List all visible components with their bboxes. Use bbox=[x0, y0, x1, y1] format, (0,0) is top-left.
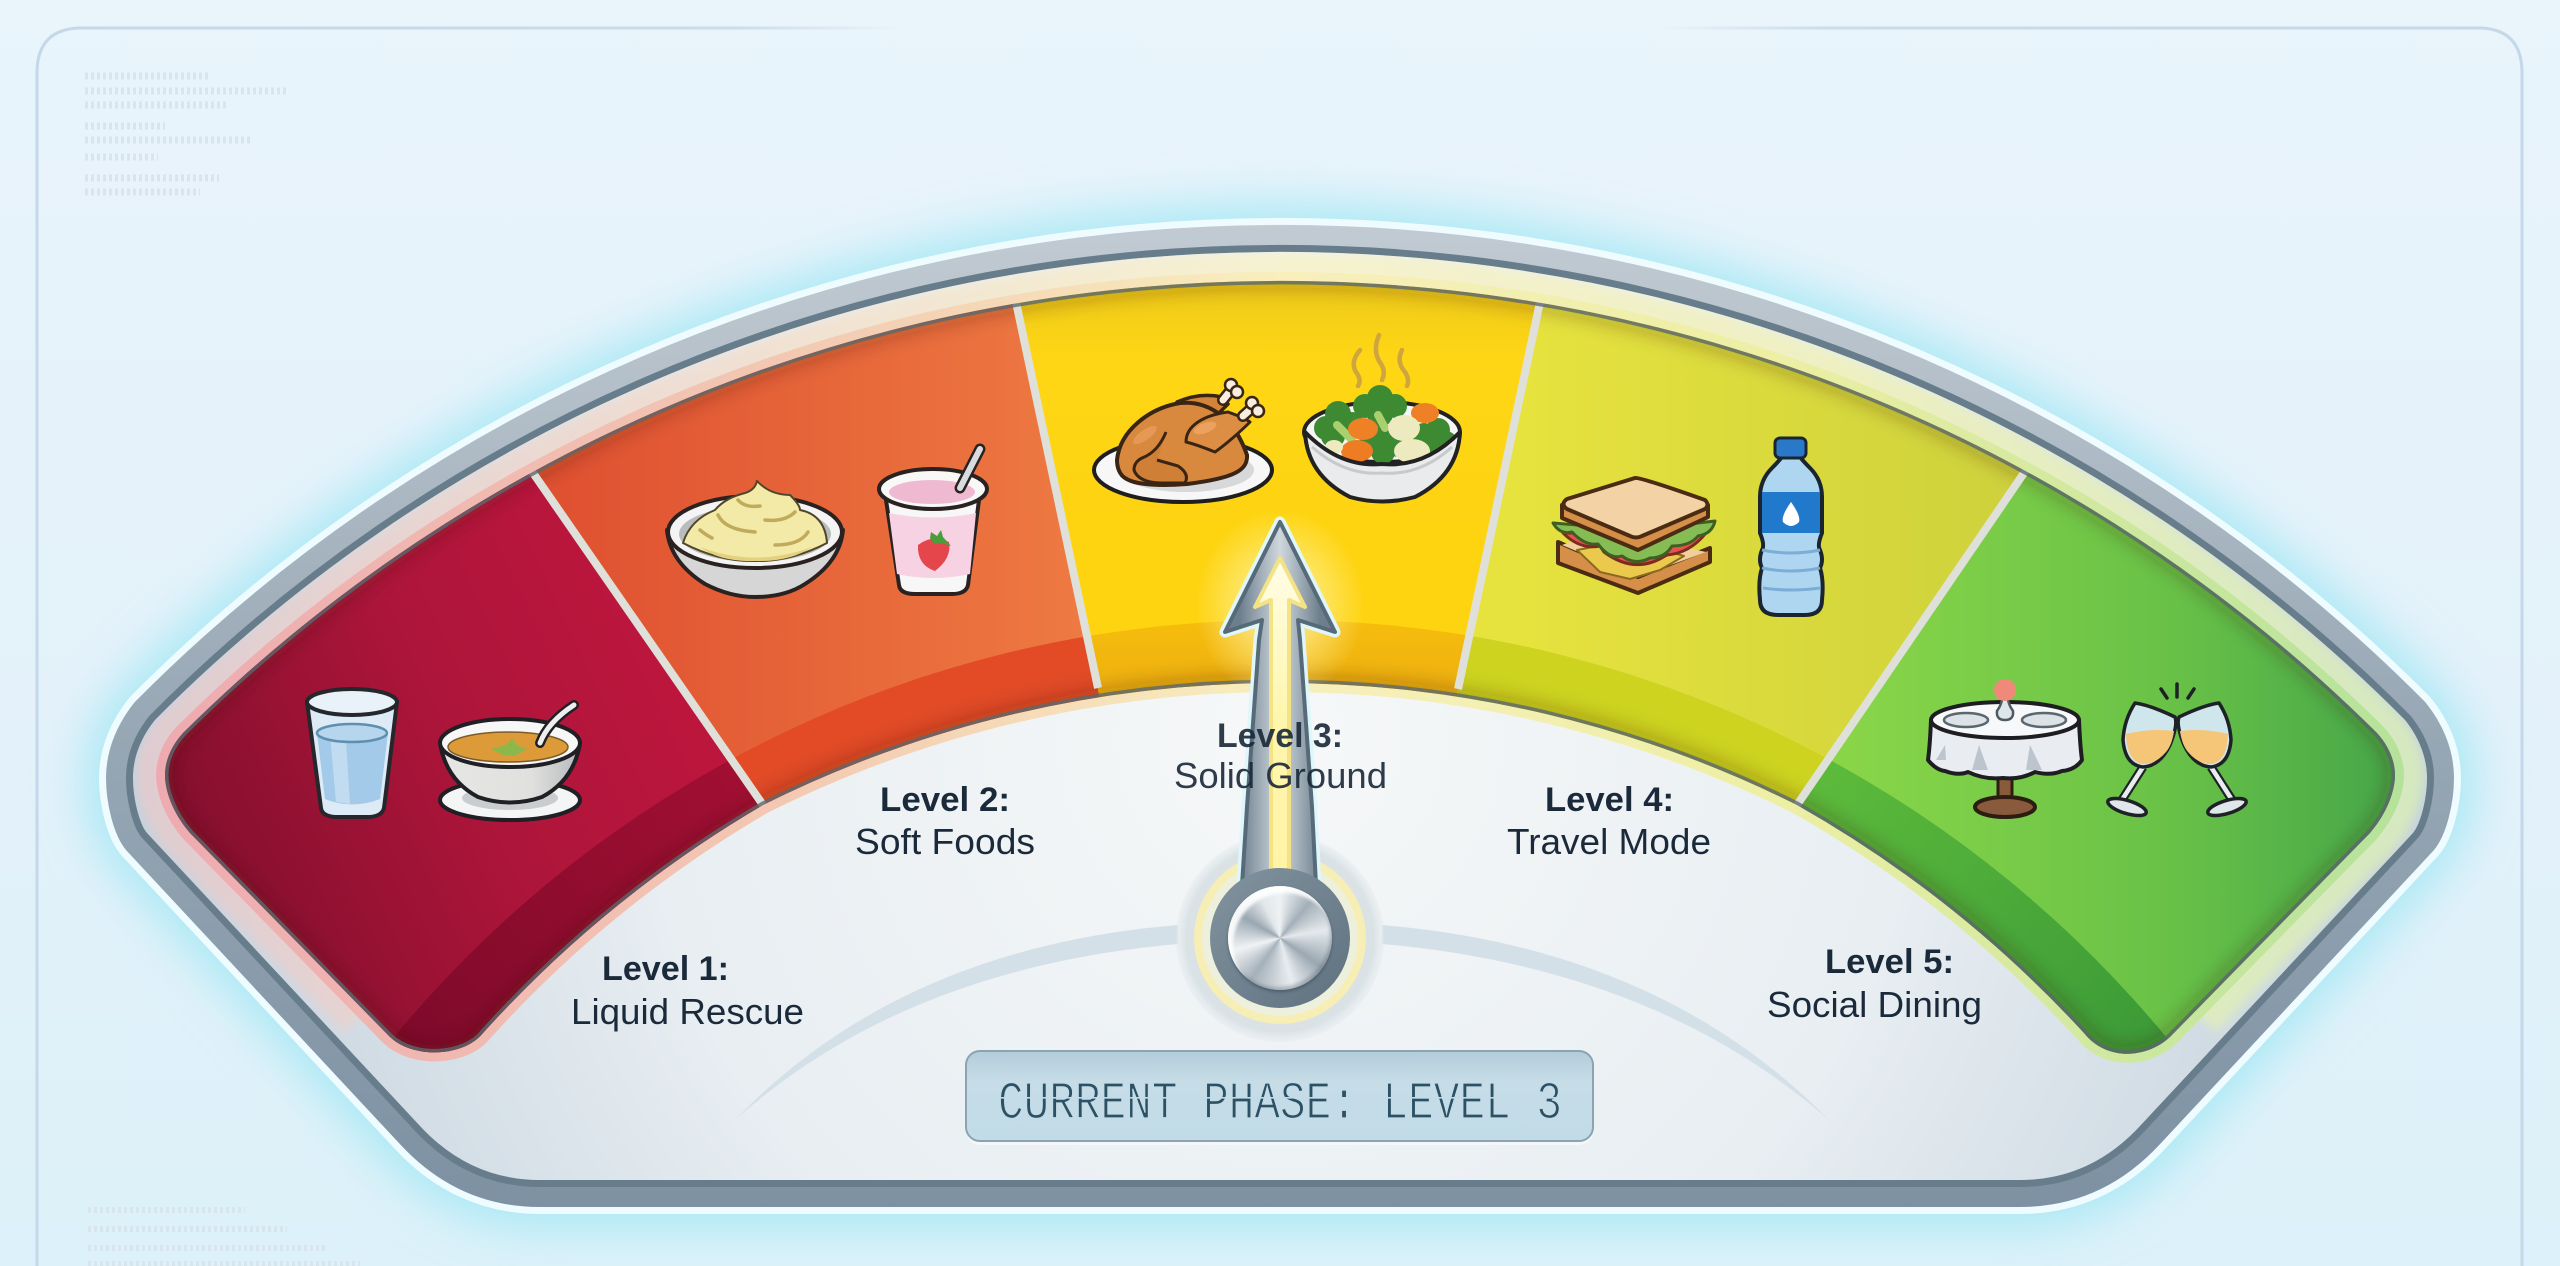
icon: soup bowl with spoon bbox=[440, 705, 580, 820]
icon: dining table with candle bbox=[1928, 679, 2082, 817]
needle hub halo bbox=[1176, 834, 1384, 1042]
gauge outer glow bbox=[133, 252, 2427, 1180]
metallic needle knob bbox=[1228, 886, 1332, 990]
decorative dial arc, right bbox=[1382, 925, 1829, 1120]
left glass bbox=[2106, 703, 2176, 819]
segment 4: yellow-green bbox=[1456, 302, 2026, 805]
segment 3: yellow bbox=[1016, 280, 1540, 698]
icon: water bottle bbox=[1759, 438, 1823, 615]
level 4 label: Level 4: bbox=[1545, 781, 1674, 819]
level 1 label: Level 1: bbox=[602, 950, 729, 988]
dial face panel bbox=[133, 252, 2427, 1180]
level 5 label: Level 5: bbox=[1825, 943, 1954, 981]
icon: steaming vegetable bowl bbox=[1304, 335, 1460, 502]
decorative dial arc, left bbox=[735, 925, 1178, 1120]
colored level segments bbox=[165, 280, 2395, 1054]
icon: toasting champagne glasses bbox=[2106, 684, 2248, 819]
segment 5: green bbox=[1797, 471, 2395, 1054]
level 2 label bbox=[855, 781, 1035, 862]
darker inner band bbox=[392, 622, 2168, 1054]
level 3 label bbox=[1174, 717, 1387, 796]
level 4 label bbox=[1507, 781, 1711, 862]
level 3 label: Level 3: bbox=[1217, 717, 1343, 755]
segment 1: red bbox=[165, 472, 763, 1052]
icon: glass of water bbox=[307, 689, 397, 817]
level 2 label: Soft Foods bbox=[855, 821, 1035, 862]
needle hub housing bbox=[1210, 868, 1350, 1008]
metal bezel bbox=[133, 252, 2427, 1180]
level 1 label: Liquid Rescue bbox=[571, 991, 804, 1032]
right glass bbox=[2178, 703, 2248, 819]
level 3 label: Solid Ground bbox=[1174, 755, 1387, 796]
faint placeholder text blocks, bottom left bbox=[88, 1210, 360, 1264]
level 4 label: Travel Mode bbox=[1507, 821, 1711, 862]
icon: strawberry yogurt cup bbox=[879, 449, 987, 594]
needle bbox=[1195, 510, 1365, 885]
LCD phase readout: CURRENT PHASE: LEVEL 3 bbox=[998, 1075, 1562, 1134]
pale band around segments bbox=[165, 281, 2395, 1054]
faint placeholder text blocks, top left bbox=[85, 76, 288, 192]
gauge body bbox=[133, 252, 2427, 1180]
icon: sandwich bbox=[1553, 478, 1715, 593]
level 5 label: Social Dining bbox=[1767, 984, 1982, 1025]
icon: roast chicken on plate bbox=[1094, 379, 1272, 502]
level 2 label: Level 2: bbox=[880, 781, 1010, 819]
level 1 label bbox=[571, 950, 804, 1032]
icon: mashed potatoes bowl bbox=[667, 481, 843, 597]
segment 2: orange bbox=[532, 304, 1100, 805]
LCD phase readout bbox=[966, 1051, 1593, 1145]
level 5 label bbox=[1767, 943, 1982, 1025]
